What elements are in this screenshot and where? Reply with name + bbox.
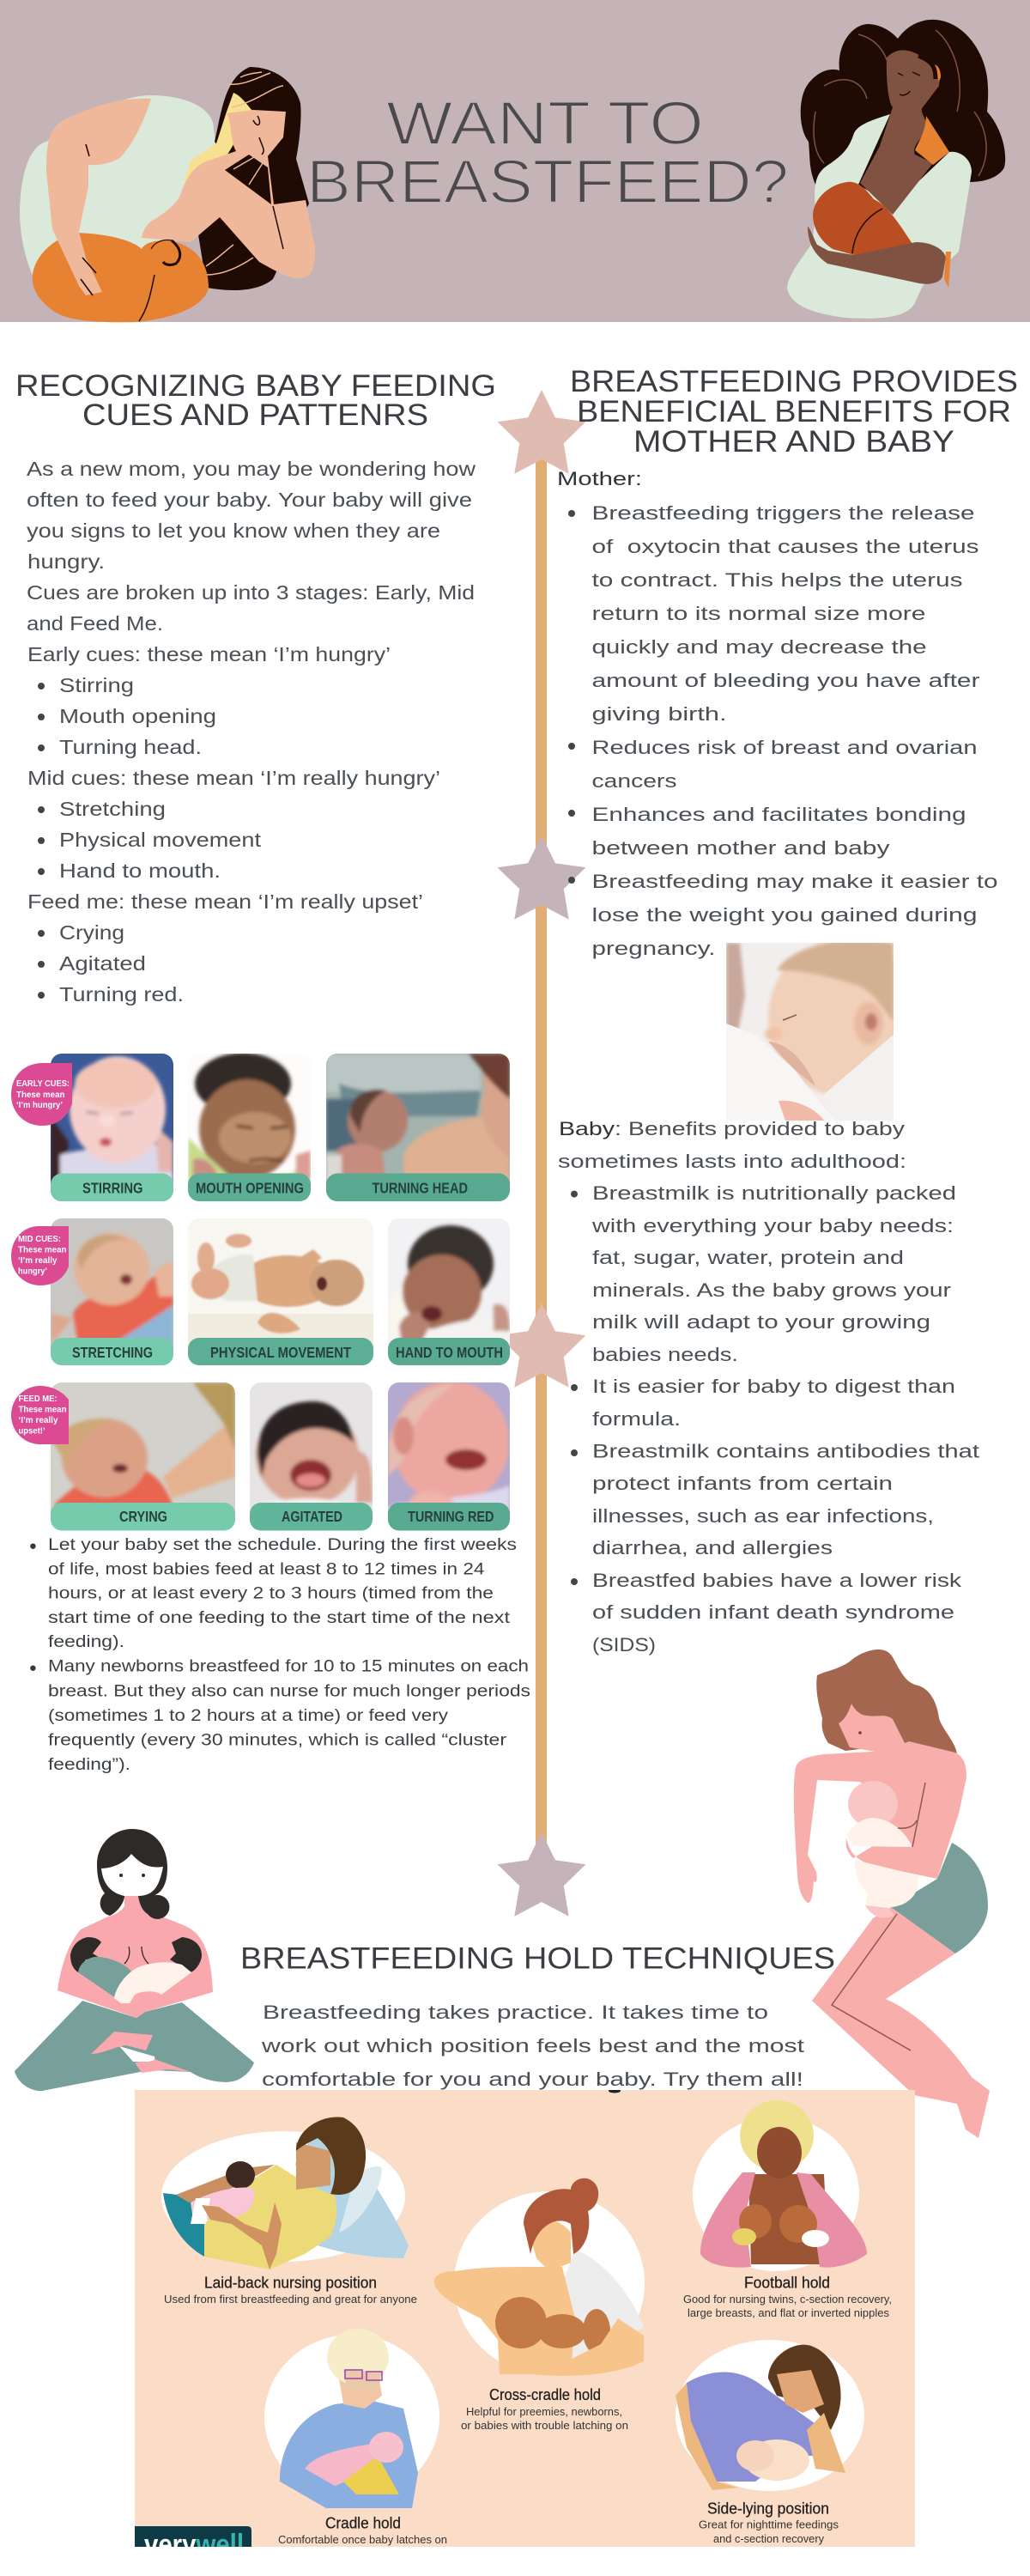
caption: cross-cradle (461, 2386, 628, 2432)
cue labels: green bars: CRYING (119, 1508, 167, 1525)
cue labels: green bars: PHYSICAL MOVEMENT (210, 1344, 351, 1361)
text block: benefits for mother: quickly and may decrease the (592, 636, 927, 658)
text block: benefits for baby: Baby : Benefits provided to baby (559, 1118, 906, 1139)
photo card: physical movement (188, 1218, 373, 1365)
star marker 2 (498, 835, 585, 920)
text block: feeding cues intro and lists: As a new mom, you may be wondering how (27, 458, 476, 480)
text block: benefits for mother: Mother: (557, 468, 642, 489)
badge: feed me (11, 1386, 69, 1444)
caption: cradle: Comfortable once baby latches on (278, 2533, 447, 2546)
text block: feeding schedule tips: Let your baby set the schedule. During the first weeks (48, 1536, 517, 1554)
text block: benefits for mother: Breastfeeding triggers the release (592, 502, 975, 524)
text block: feeding schedule tips: breast. But they also can nurse for much longer periods (48, 1683, 530, 1701)
caption: cross-cradle: Helpful for preemies, newborns, (466, 2405, 622, 2418)
caption: laid-back: Used from first breastfeeding and great for anyone (164, 2293, 417, 2306)
badge: feed me: FEED ME: (19, 1394, 57, 1404)
text block: benefits for baby: formula. (592, 1408, 681, 1430)
cue labels: green bars: MOUTH OPENING (196, 1180, 304, 1197)
heading: benefits: BENEFICIAL BENEFITS FOR (577, 395, 1011, 428)
text block: benefits for baby: Breastmilk contains antibodies that (592, 1441, 980, 1461)
photo card: stretching (51, 1218, 173, 1365)
position: side-lying (676, 2340, 864, 2491)
caption: cross-cradle: Cross-cradle hold (489, 2386, 601, 2403)
star marker 3 (498, 1303, 585, 1388)
text block: benefits for mother (557, 468, 997, 959)
badge: early cues: ‘I’m hungry’ (16, 1100, 63, 1110)
text block: hold techniques intro: work out which position feels best and the most (261, 2035, 805, 2057)
text block: benefits for baby (558, 1118, 980, 1656)
text block: feeding cues intro and lists: Agitated (59, 952, 146, 975)
text block: benefits for mother: amount of bleeding you have after (592, 670, 980, 691)
heading: hold techniques: BREASTFEEDING HOLD TECHNIQUES (240, 1942, 835, 1975)
text block: feeding cues intro and lists: Turning red. (59, 983, 184, 1005)
text block: benefits for mother: between mother and baby (592, 837, 890, 859)
text block: benefits for mother: Reduces risk of breast and ovarian (592, 737, 977, 758)
photo card: crying (51, 1382, 235, 1530)
badge: mid cues (11, 1226, 69, 1285)
caption: side-lying: Great for nighttime feedings (699, 2518, 839, 2531)
text block: benefits for mother: Enhances and facilitates bonding (592, 804, 966, 825)
caption: laid-back: Laid-back nursing position (204, 2274, 377, 2291)
text block: feeding cues intro and lists: Stirring (59, 674, 134, 696)
text block: benefits for baby: Breastfed babies have a lower risk (592, 1570, 962, 1591)
badge: mid cues: ‘I’m really (18, 1255, 58, 1266)
illustration: mother nursing, right of banner (787, 20, 1005, 319)
text block: feeding schedule tips: (sometimes 1 to 2 hours at a time) or feed very (48, 1707, 449, 1725)
text block: benefits for mother: pregnancy. (592, 938, 716, 959)
star marker 1 (498, 390, 585, 474)
text block: feeding cues intro and lists: Stretching (59, 798, 166, 820)
heading: benefits (570, 365, 1018, 459)
illustration: seated mother, lower left (15, 1829, 254, 2091)
header banner background (0, 0, 1030, 322)
caption: football: large breasts, and flat or inverted nipples (688, 2306, 889, 2319)
photo: nursing newborn (726, 943, 894, 1121)
badge: mid cues: MID CUES: (18, 1234, 61, 1244)
photo card: stirring (51, 1054, 173, 1202)
text block: feeding cues intro and lists (27, 458, 476, 1005)
text block: feeding schedule tips: feeding). (48, 1633, 124, 1651)
text block: benefits for mother: lose the weight you gained during (592, 904, 977, 926)
text block: benefits for baby: illnesses, such as ear infections, (592, 1505, 934, 1527)
text block: hold techniques intro (261, 2002, 805, 2090)
cue labels: green bars: STIRRING (82, 1180, 142, 1197)
caption: side-lying: Side-lying position (707, 2500, 829, 2518)
text block: feeding cues intro and lists: Mouth opening (59, 705, 216, 727)
badge: early cues: These mean (16, 1090, 65, 1100)
heading: feeding cues: CUES AND PATTENRS (82, 398, 428, 432)
caption: cross-cradle: or babies with trouble latching on (461, 2419, 628, 2432)
logo: verywell (135, 2526, 251, 2547)
text block: feeding cues intro and lists: Mid cues: these mean ‘I’m really hungry’ (27, 767, 440, 789)
text block: benefits for mother: cancers (592, 770, 676, 792)
text block: feeding cues intro and lists: you signs to let you know when they are (27, 519, 440, 542)
timeline stick (536, 455, 547, 1863)
illustration: mother nursing, left of banner (20, 67, 315, 322)
text block: benefits for baby: sometimes lasts into adulthood: (558, 1151, 906, 1172)
caption: laid-back (164, 2274, 417, 2306)
text block: feeding cues intro and lists: often to feed your baby. Your baby will give (27, 489, 472, 511)
photo card: agitated (250, 1382, 373, 1512)
badge: early cues (11, 1063, 72, 1126)
badge: early cues: EARLY CUES: (16, 1078, 70, 1089)
title: BREASTFEED? (306, 149, 789, 216)
text block: feeding schedule tips: hours, or at least every 2 to 3 hours (timed from the (48, 1585, 494, 1603)
text block: feeding schedule tips: feeding”). (48, 1756, 130, 1774)
caption: side-lying: and c-section recovery (713, 2532, 824, 2545)
cue labels: green bars: STRETCHING (72, 1344, 153, 1361)
caption: football: Good for nursing twins, c-section recovery, (683, 2293, 892, 2306)
star marker 4 (498, 1832, 585, 1917)
text block: feeding schedule tips (30, 1536, 530, 1774)
cue labels: green bars: AGITATED (282, 1508, 342, 1525)
text block: benefits for baby: diarrhea, and allergies (592, 1537, 833, 1558)
cue labels: green bars: TURNING RED (408, 1508, 494, 1525)
text block: feeding schedule tips: start time of one feeding to the start time of the next (48, 1609, 511, 1627)
photo card: turning red (388, 1381, 510, 1530)
cue labels: green bars: TURNING HEAD (373, 1180, 468, 1197)
text block: benefits for baby: protect infants from certain (592, 1473, 893, 1494)
caption: cradle (278, 2514, 447, 2546)
text block: benefits for mother: giving birth. (592, 703, 726, 725)
text block: benefits for baby: milk will adapt to your growing (592, 1311, 930, 1333)
badge: feed me: upset!’ (19, 1426, 45, 1437)
position: football (693, 2100, 867, 2271)
text block: benefits for mother: of oxytocin that causes the uterus (592, 536, 978, 557)
text block: feeding cues intro and lists: Feed me: these mean ‘I’m really upset’ (27, 890, 423, 913)
caption: cradle: Cradle hold (325, 2514, 401, 2531)
logo: verywell: verywell (144, 2529, 244, 2561)
badge: feed me: These mean (19, 1405, 67, 1415)
text block: feeding cues intro and lists: Early cues: these mean ‘I’m hungry’ (27, 643, 391, 665)
title: WANT TO (386, 90, 704, 158)
badge: feed me: ‘I’m really (19, 1415, 58, 1425)
text block: feeding schedule tips: Many newborns breastfeed for 10 to 15 minutes on each (48, 1658, 529, 1676)
text block: benefits for mother: return to its normal size more (592, 603, 925, 624)
heading: benefits: MOTHER AND BABY (633, 425, 954, 459)
text block: benefits for baby: babies needs. (592, 1344, 738, 1365)
text block: benefits for mother: Breastfeeding may make it easier to (592, 871, 997, 892)
heading: feeding cues: RECOGNIZING BABY FEEDING (15, 369, 496, 403)
heading: benefits: BREASTFEEDING PROVIDES (570, 365, 1018, 398)
text block: benefits for baby: fat, sugar, water, protein and (592, 1247, 904, 1268)
position: laid-back (161, 2117, 409, 2269)
text block: benefits for baby: minerals. As the baby grows your (592, 1279, 952, 1301)
cue labels: green bars: HAND TO MOUTH (396, 1344, 503, 1361)
text block: benefits for mother: to contract. This helps the uterus (592, 569, 963, 591)
text block: feeding cues intro and lists: Hand to mouth. (59, 860, 221, 882)
text block: feeding cues intro and lists: hungry. (27, 550, 105, 573)
title (306, 90, 789, 216)
caption: football: Football hold (744, 2274, 830, 2291)
photo card: turning head (326, 1054, 510, 1202)
text block: hold techniques intro: Breastfeeding takes practice. It takes time to (263, 2002, 768, 2023)
heading: feeding cues (15, 369, 496, 432)
text block: benefits for baby: Breastmilk is nutritionally packed (592, 1182, 956, 1204)
text block: feeding cues intro and lists: and Feed Me. (27, 612, 163, 635)
position: cross-cradle (434, 2178, 645, 2376)
text block: hold techniques intro: comfortable for you and your baby. Try them all! (262, 2069, 803, 2090)
text block: feeding cues intro and lists: Physical movement (59, 829, 262, 851)
text block: feeding cues intro and lists: Cues are broken up into 3 stages: Early, Mid (27, 581, 475, 604)
caption: football (683, 2274, 892, 2319)
text block: benefits for baby: with everything your baby needs: (591, 1215, 954, 1236)
text block: benefits for baby: It is easier for baby to digest than (592, 1376, 955, 1397)
illustration: standing mother, lower right (794, 1649, 990, 2138)
badge: mid cues: hungry’ (18, 1267, 47, 1277)
text block: benefits for baby: of sudden infant death syndrome (592, 1601, 954, 1623)
photo card: hand to mouth (388, 1218, 510, 1347)
caption: side-lying (699, 2500, 839, 2545)
text block: feeding cues intro and lists: Turning head. (59, 736, 202, 758)
text block: feeding cues intro and lists: Crying (59, 921, 124, 944)
cue labels: green bars (51, 1173, 510, 1530)
text block: feeding schedule tips: of life, most babies feed at least 8 to 12 times in 24 (48, 1560, 485, 1578)
text block: benefits for baby: (SIDS) (592, 1634, 656, 1656)
text block: feeding schedule tips: frequently (every 30 minutes, which is called “cluster (48, 1732, 507, 1750)
position: cradle (264, 2329, 439, 2508)
badge: mid cues: These mean (18, 1245, 67, 1255)
photo card: mouth opening (188, 1053, 311, 1202)
panel: hold positions (135, 2088, 915, 2561)
